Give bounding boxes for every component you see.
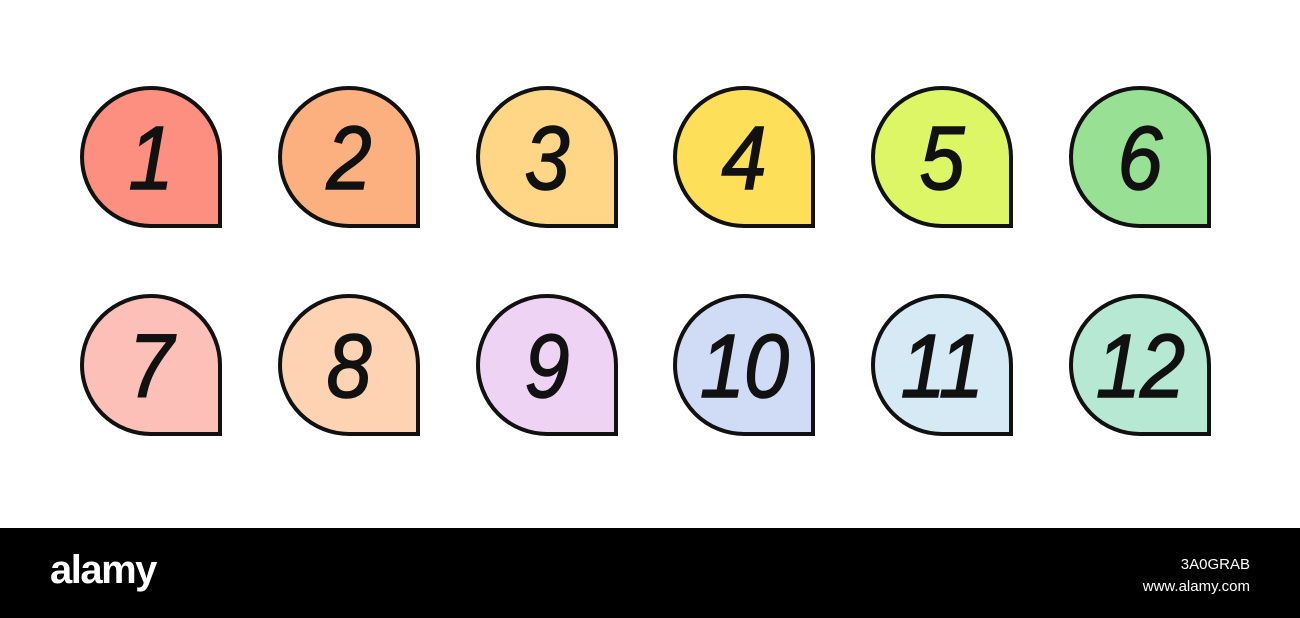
badge 2: 2: [327, 109, 371, 209]
badge 1: 1: [129, 109, 173, 209]
badge 4: [673, 86, 815, 228]
badge 11: 11: [901, 317, 983, 417]
badge 9: [476, 294, 618, 436]
badge 11: [871, 294, 1013, 436]
badge 6: 6: [1118, 109, 1162, 209]
badge 9: 9: [525, 317, 569, 417]
badge 10: 10: [700, 317, 788, 417]
footer bar: [0, 528, 1300, 618]
image id: [1142, 556, 1250, 595]
image id: www.alamy.com: [1143, 578, 1250, 595]
badge 12: [1069, 294, 1211, 436]
badge 1: [80, 86, 222, 228]
badge 5: [871, 86, 1013, 228]
badge 10: [673, 294, 815, 436]
badge 3: 3: [525, 109, 569, 209]
badge 12: 12: [1096, 317, 1184, 417]
badge 8: [278, 294, 420, 436]
badge 7: 7: [129, 317, 173, 417]
badge 7: [80, 294, 222, 436]
badge 2: [278, 86, 420, 228]
badge 3: [476, 86, 618, 228]
badge 8: 8: [327, 317, 371, 417]
badge 4: 4: [722, 109, 766, 209]
logo: alamy: [50, 548, 156, 592]
badge 5: 5: [920, 109, 964, 209]
badge 6: [1069, 86, 1211, 228]
image id: 3A0GRAB: [1181, 556, 1250, 573]
